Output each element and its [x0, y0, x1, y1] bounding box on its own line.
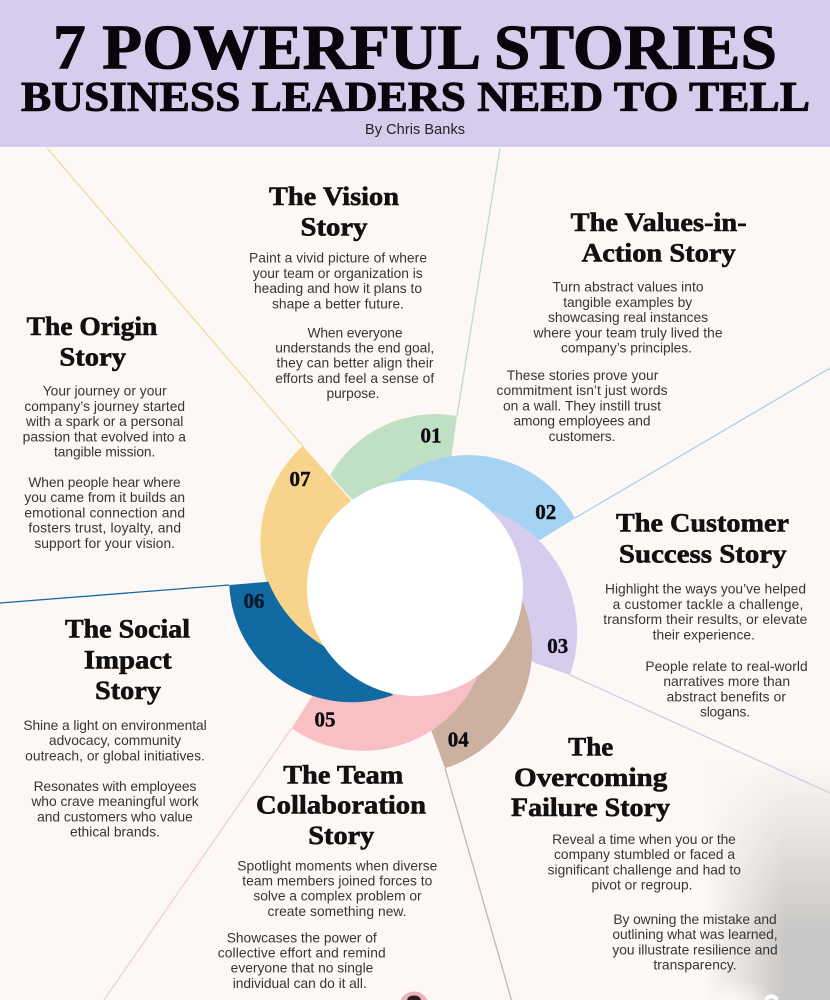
text: overcoming failure: Reveal a time when you or the	[552, 832, 736, 847]
text: origin: with a spark or a personal	[25, 414, 183, 429]
panel: the social impact story	[23, 614, 207, 840]
text: origin: Your journey or your	[43, 384, 167, 399]
text: customer: a customer tackle a challenge,	[613, 597, 803, 612]
panel: the vision story	[249, 181, 434, 401]
number 04: 04	[448, 728, 469, 752]
text: vision: understands the end goal,	[275, 340, 434, 356]
text: vision: heading and how it plans to	[254, 281, 422, 296]
segment 07	[260, 446, 351, 650]
heading: overcoming failure: The	[568, 732, 613, 762]
text: overcoming failure: you illustrate resilience and	[612, 942, 778, 957]
heading: values: The Values-in-	[571, 207, 747, 237]
text: values	[496, 280, 723, 444]
text: team collaboration: solve a complex problem or	[253, 889, 422, 904]
text: social impact: who crave meaningful work	[30, 794, 199, 809]
text: team collaboration: Spotlight moments when diverse	[237, 858, 438, 873]
heading: overcoming failure: Overcoming	[514, 762, 667, 792]
text: overcoming failure: outlining what was learned,	[612, 927, 778, 942]
heading: social impact: Impact	[84, 644, 172, 674]
text: vision: they can better align their	[276, 356, 434, 371]
text: social impact: Resonates with employees	[34, 779, 196, 794]
text: origin: When people hear where	[28, 475, 181, 490]
text: vision: purpose.	[326, 386, 380, 401]
text: vision: Paint a vivid picture of where	[249, 251, 427, 266]
byline: By Chris Banks	[365, 122, 465, 138]
text: overcoming failure	[548, 832, 778, 973]
heading: team collaboration: The Team	[283, 759, 403, 789]
text: team collaboration: individual can do it all.	[233, 976, 367, 991]
heading: overcoming failure: Failure Story	[511, 792, 670, 822]
text: customer	[603, 582, 808, 720]
text: customer: their experience.	[653, 627, 755, 642]
text: vision: shape a better future.	[272, 296, 404, 311]
text: team collaboration: Showcases the power of	[227, 930, 377, 945]
text: team collaboration: create something new.	[268, 904, 406, 919]
heading: team collaboration: Collaboration	[256, 789, 426, 819]
text: origin: fosters trust, loyalty, and	[28, 521, 181, 536]
panel: the origin story	[23, 311, 186, 551]
pinwheel diagram	[229, 414, 577, 768]
heading: values: Action Story	[582, 238, 736, 268]
text: team collaboration: everyone that no single	[231, 961, 374, 976]
title: BUSINESS LEADERS NEED TO TELL	[21, 75, 810, 121]
heading: customer: Success Story	[619, 538, 787, 568]
text: customer: abstract benefits or	[667, 689, 786, 704]
text: social impact: Shine a light on environmental	[23, 718, 207, 733]
heading: vision: Story	[300, 212, 368, 242]
text: customer: Highlight the ways you’ve helped	[605, 582, 806, 597]
segment 01	[330, 414, 457, 500]
number 05: 05	[314, 708, 336, 732]
text: customer: People relate to real-world	[645, 659, 808, 674]
text: overcoming failure: transparency.	[653, 958, 737, 973]
title: 7 POWERFUL STORIES	[53, 12, 777, 82]
text: customer: transform their results, or elevate	[603, 612, 808, 627]
panel: the values-in-action story	[496, 207, 747, 444]
white ring fragment	[766, 996, 777, 1000]
text: vision: efforts and feel a sense of	[275, 371, 434, 386]
heading: customer: The Customer	[616, 508, 789, 538]
text: customer: narratives more than	[663, 674, 790, 689]
text: values: showcasing real instances	[548, 310, 708, 325]
text: social impact: advocacy, community	[49, 733, 181, 748]
text: team collaboration: collective effort and remind	[218, 946, 386, 960]
title	[21, 12, 810, 121]
text: origin: emotional connection and	[24, 505, 185, 520]
number 03: 03	[547, 634, 568, 658]
heading: social impact: The Social	[65, 614, 190, 644]
number 06: 06	[244, 589, 264, 613]
text: vision: When everyone	[308, 325, 403, 340]
text: values: company’s principles.	[561, 340, 692, 356]
heading: social impact	[65, 614, 190, 705]
text: social impact: and customers who value	[37, 809, 193, 824]
text: values: on a wall. They instill trust	[503, 398, 661, 413]
header band	[0, 0, 830, 147]
heading: overcoming failure	[511, 732, 670, 822]
text: overcoming failure: company stumbled or faced a	[554, 847, 735, 862]
heading: team collaboration	[256, 759, 426, 850]
text: social impact: ethical brands.	[70, 825, 160, 840]
text: values: These stories prove your	[507, 368, 659, 383]
text: team collaboration: team members joined forces to	[242, 874, 433, 888]
number 01: 01	[420, 424, 442, 448]
panel: the overcoming failure story	[511, 732, 778, 973]
text: vision	[249, 251, 434, 401]
heading: vision: The Vision	[269, 181, 399, 211]
panel: the team collaboration story	[218, 759, 438, 991]
heading: vision	[269, 181, 399, 242]
segment 02	[393, 455, 575, 588]
segment 06	[229, 582, 393, 702]
text: overcoming failure: significant challenge and had to	[548, 862, 741, 877]
text: origin: tangible mission.	[54, 445, 155, 460]
heading: origin: Story	[59, 342, 126, 372]
text: origin: passion that evolved into a	[23, 429, 186, 444]
center circle	[307, 480, 523, 696]
text: origin: you came from it builds an	[24, 490, 185, 505]
heading: origin	[27, 311, 158, 372]
avatar fragment	[400, 992, 428, 1000]
text: overcoming failure: pivot or regroup.	[592, 878, 692, 893]
text: social impact: outreach, or global initiatives.	[25, 748, 205, 763]
text: team collaboration	[218, 858, 438, 991]
text: values: tangible examples by	[563, 295, 692, 310]
heading: social impact: Story	[95, 675, 161, 705]
text: origin	[23, 384, 186, 551]
heading: team collaboration: Story	[308, 820, 374, 850]
number 02: 02	[535, 500, 556, 524]
text: values: where your team truly lived the	[532, 325, 723, 340]
segment 03	[415, 512, 577, 675]
segment 04	[415, 588, 532, 768]
corner shadow	[718, 786, 830, 1000]
number 07: 07	[290, 467, 310, 491]
text: values: customers.	[549, 429, 615, 444]
heading: values	[571, 207, 747, 268]
text: values: commitment isn’t just words	[496, 383, 668, 398]
heading: customer	[616, 508, 789, 568]
text: overcoming failure: By owning the mistake and	[613, 912, 777, 927]
text: origin: company’s journey started	[24, 399, 185, 414]
text: social impact	[23, 718, 207, 840]
segment 05	[292, 588, 477, 751]
text: values: among employees and	[514, 414, 650, 429]
text: vision: your team or organization is	[253, 266, 423, 281]
text: origin: support for your vision.	[34, 536, 175, 551]
text: customer: slogans.	[700, 705, 750, 720]
panel: the customer success story	[603, 508, 808, 720]
text: values: Turn abstract values into	[552, 280, 704, 295]
heading: origin: The Origin	[27, 311, 158, 341]
